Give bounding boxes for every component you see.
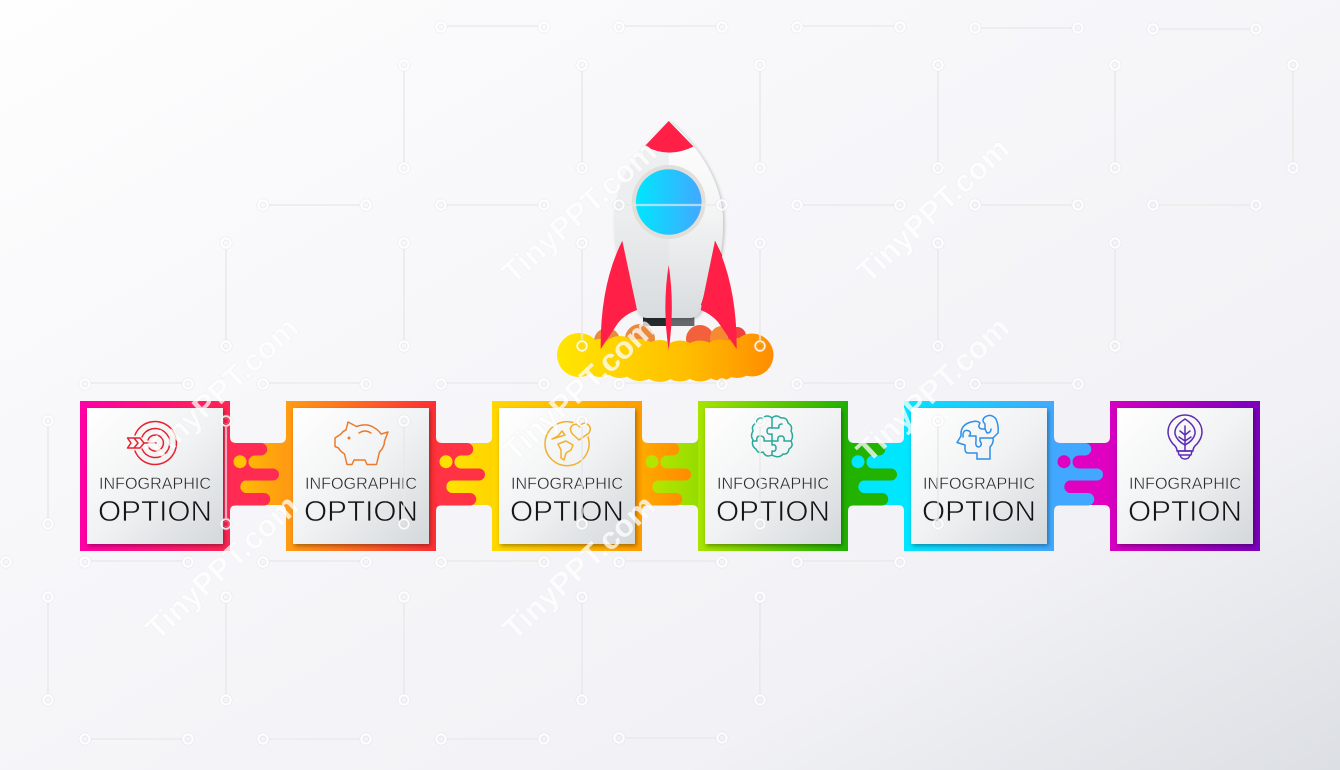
watermarks: TinyPPT.com — [495, 134, 663, 290]
right fin — [701, 241, 737, 349]
card 1 — [80, 401, 230, 551]
watermarks — [139, 131, 1016, 647]
label: INFOGRAPHIC — [305, 474, 417, 493]
connector 2 — [436, 437, 492, 511]
icon: puzzle brain — [752, 416, 792, 457]
nose cone — [645, 121, 694, 153]
connector 5 — [1054, 437, 1110, 511]
card 3 — [492, 401, 642, 551]
heading: OPTION — [922, 496, 1036, 528]
label: INFOGRAPHIC — [717, 474, 829, 493]
icon: head with puzzle — [957, 415, 998, 459]
rocket illustration — [557, 121, 774, 382]
center fin — [665, 265, 672, 350]
card 6 — [1110, 401, 1260, 551]
icon: leaf light bulb — [1168, 415, 1202, 459]
watermarks: TinyPPT.com — [139, 310, 305, 469]
watermarks: TinyPPT.com — [139, 488, 305, 647]
label: INFOGRAPHIC — [99, 474, 211, 493]
heading: OPTION — [98, 496, 212, 528]
label: INFOGRAPHIC — [1129, 474, 1241, 493]
watermarks: TinyPPT.com — [850, 131, 1016, 290]
watermarks: TinyPPT.com — [496, 488, 662, 647]
fin shadow — [701, 241, 722, 310]
label: INFOGRAPHIC — [511, 474, 623, 493]
heading: OPTION — [304, 496, 418, 528]
icon: target with arrow — [128, 422, 176, 464]
heading: OPTION — [716, 496, 830, 528]
panel: option cards chain — [80, 401, 1260, 551]
exhaust puffs behind rocket — [594, 324, 746, 354]
label: INFOGRAPHIC — [923, 474, 1035, 493]
icon: globe with heart — [545, 422, 590, 466]
heading: OPTION — [510, 496, 624, 528]
connector 3 — [642, 437, 698, 511]
porthole window — [632, 165, 706, 239]
connector 1 — [230, 437, 286, 511]
left fin — [601, 241, 637, 349]
connector 4 — [848, 437, 904, 511]
watermarks: TinyPPT.com — [850, 310, 1016, 469]
flame cloud — [557, 333, 774, 382]
watermarks: TinyPPT.com — [496, 310, 662, 469]
nozzle — [643, 317, 694, 326]
rocket body — [614, 121, 723, 318]
heading: OPTION — [1128, 496, 1242, 528]
icon: piggy bank — [335, 422, 388, 464]
card 4 — [698, 401, 848, 551]
card 5 — [904, 401, 1054, 551]
card 2 — [286, 401, 436, 551]
